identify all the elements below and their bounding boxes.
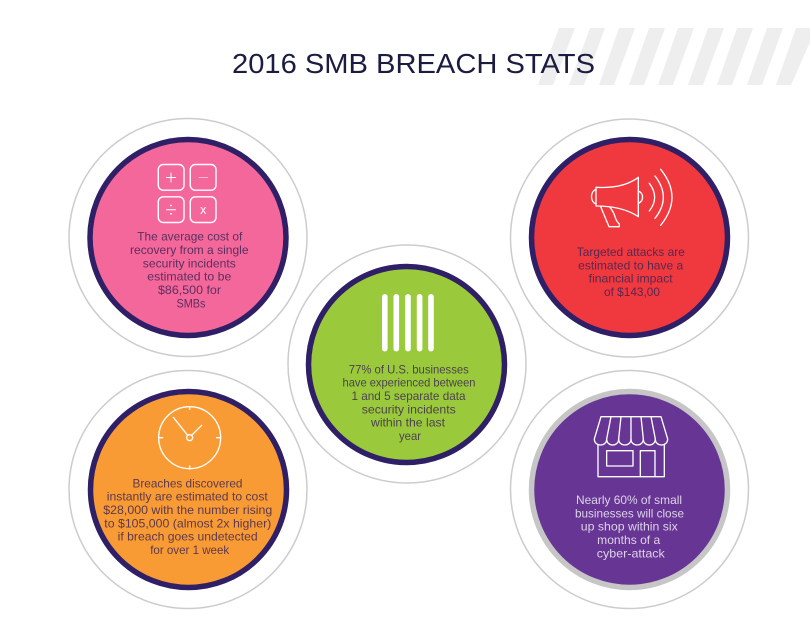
text: 77% of businesses: security incidents xyxy=(362,403,456,416)
icon: megaphone xyxy=(591,169,672,227)
icon: calculator: x xyxy=(200,203,207,217)
text: small business closures: cyber-attack xyxy=(597,547,665,560)
title: 2016 SMB BREACH STATS xyxy=(232,48,595,79)
text: targeted attacks: Targeted attacks are xyxy=(577,246,685,259)
text: small business closures: months of a xyxy=(597,534,661,547)
text: 77% of businesses: have experienced between xyxy=(342,377,476,390)
text: recovery cost xyxy=(130,231,249,310)
panel: small business closures xyxy=(510,370,748,608)
text: recovery cost: SMBs xyxy=(176,297,206,310)
icon: storefront xyxy=(594,417,668,477)
text: small business closures: businesses will close xyxy=(575,507,684,520)
panel: targeted attacks xyxy=(510,119,748,357)
text: targeted attacks: estimated to have a xyxy=(578,259,684,272)
text: breach discovery cost xyxy=(103,477,272,557)
text: 77% of businesses: 1 and 5 separate data xyxy=(352,390,466,403)
text: 77% of businesses: within the last xyxy=(370,417,446,430)
text: breach discovery cost: if breach goes undetected xyxy=(118,531,258,544)
text: breach discovery cost: for over 1 week xyxy=(150,544,229,557)
text: 77% of businesses: year xyxy=(399,430,421,443)
icon: five bars xyxy=(382,294,434,352)
text: small business closures xyxy=(575,494,684,560)
panel: breach discovery cost xyxy=(69,370,307,608)
text: targeted attacks xyxy=(577,246,685,299)
text: targeted attacks: financial impact xyxy=(589,273,674,286)
text: 77% of businesses: 77% of U.S. businesses xyxy=(349,363,469,376)
text: breach discovery cost: Breaches discovered xyxy=(132,477,242,490)
text: recovery cost: security incidents xyxy=(143,257,236,270)
text: 77% of businesses xyxy=(342,363,476,443)
text: small business closures: Nearly 60% of small xyxy=(576,494,682,507)
panel: 77% of businesses xyxy=(288,245,526,483)
text: targeted attacks: of $143,00 xyxy=(604,286,660,299)
text: small business closures: up shop within six xyxy=(581,521,678,534)
text: recovery cost: The average cost of xyxy=(137,231,243,244)
icon: calculator xyxy=(158,164,216,222)
text: recovery cost: recovery from a single xyxy=(130,244,249,257)
text: recovery cost: $86,500 for xyxy=(158,284,221,297)
text: breach discovery cost: instantly are estimated to cost xyxy=(107,491,269,504)
text: recovery cost: estimated to be xyxy=(147,271,231,284)
text: breach discovery cost: $28,000 with the number rising xyxy=(103,504,272,517)
icon: clock xyxy=(159,407,221,469)
text: breach discovery cost: to $105,000 (almost 2x higher) xyxy=(104,517,271,530)
panel: recovery cost xyxy=(69,118,307,356)
